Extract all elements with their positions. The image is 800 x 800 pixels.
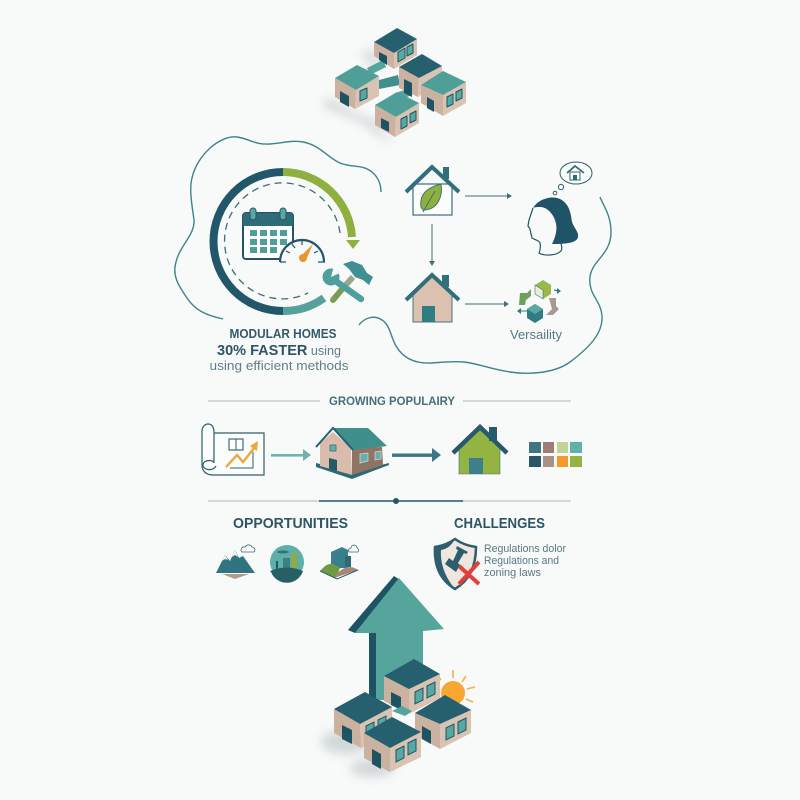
text: challenges description	[484, 543, 566, 579]
house A	[374, 28, 417, 69]
face outline	[528, 208, 562, 255]
text: challenges description: Regulations and	[484, 555, 559, 567]
house D	[421, 71, 466, 116]
chart: speed ring with calendar and tools	[213, 172, 373, 311]
decorative outline curve: lower right	[359, 197, 611, 373]
ring arrowhead	[346, 240, 360, 249]
icon: versatility cubes	[517, 280, 561, 323]
text: modular homes caption: using efficient methods	[210, 358, 349, 373]
icon: tan house	[406, 275, 459, 322]
hair	[533, 197, 578, 244]
house front	[364, 717, 421, 772]
icon: mountains	[216, 545, 255, 579]
text: modular homes caption	[210, 327, 349, 373]
icon: green house	[453, 427, 507, 474]
illustration: bottom modular house cluster	[321, 659, 471, 777]
arrow: blueprint to house	[271, 449, 311, 461]
icon: city in circle	[270, 545, 304, 583]
arrow: tan house to versatility	[465, 301, 509, 307]
house E	[375, 92, 419, 137]
text: modular homes caption: MODULAR HOMES	[230, 327, 336, 341]
icon: 3D house	[316, 428, 389, 479]
icon: blueprint with growth chart	[202, 424, 264, 475]
ring dark arc	[213, 172, 283, 311]
arrow: large upward growth arrow	[348, 576, 444, 700]
icon: gauge	[280, 240, 325, 262]
house back	[384, 659, 440, 714]
arrow: house to green house	[392, 448, 441, 462]
house right	[415, 695, 471, 749]
house left	[334, 692, 392, 748]
arrow: leaf house to tan house	[429, 224, 435, 266]
heading: opportunities: OPPORTUNITIES	[233, 515, 348, 532]
icon: buildings on hills	[320, 545, 359, 579]
heading: growing popularity: GROWING POPULAIRY	[329, 396, 455, 408]
ring teal arc	[283, 298, 324, 311]
dashed inner ring	[225, 183, 340, 299]
icon: sun	[438, 670, 475, 705]
house C	[399, 54, 442, 97]
heading: challenges: CHALLENGES	[454, 515, 545, 532]
icon: house with leaf	[406, 167, 459, 215]
text: modular homes caption: 30% FASTER using	[217, 342, 341, 359]
ring green arc	[283, 172, 352, 237]
icon: wrench and hammer	[322, 261, 373, 300]
icon: person thinking of home	[528, 162, 592, 255]
text: challenges description: zoning laws	[484, 567, 541, 579]
icon: calendar	[243, 208, 293, 259]
text: challenges description: Regulations dolor	[484, 543, 566, 555]
house B	[335, 65, 379, 109]
icon: shield with gavel and cross	[435, 539, 479, 589]
thought bubble	[560, 162, 592, 184]
decorative outline curve: upper left	[175, 137, 381, 319]
text: versatility label: Versaility	[510, 327, 562, 342]
legend: colour swatches	[529, 442, 582, 467]
illustration: top modular house cluster	[320, 28, 466, 142]
arrow: leaf house to person	[465, 193, 512, 199]
